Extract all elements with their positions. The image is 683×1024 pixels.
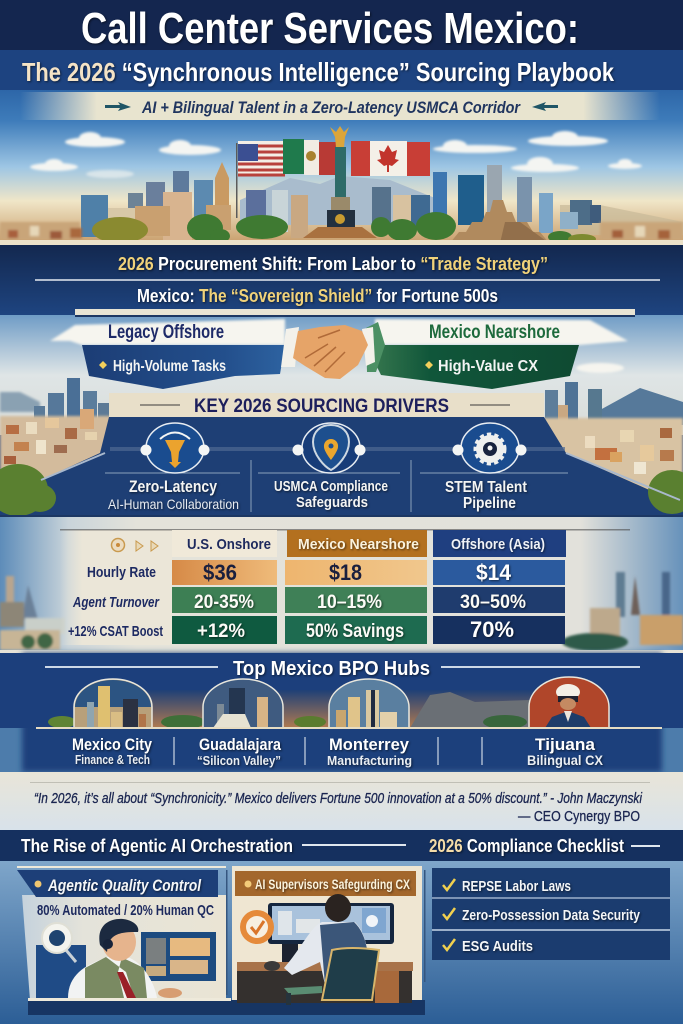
automation split text: 80% Automated / 20% Human QC bbox=[37, 902, 214, 919]
column header: U.S. Onshore bbox=[172, 530, 277, 557]
mexico nearshore ribbon bbox=[366, 345, 579, 389]
hubs heading: Top Mexico BPO Hubs bbox=[233, 658, 430, 680]
left tree bbox=[0, 464, 56, 516]
foreground town bbox=[0, 222, 683, 240]
flag: Mexico bbox=[283, 139, 336, 175]
hub label: Guadalajara: “Silicon Valley” bbox=[197, 753, 281, 768]
row: agent turnover: 30–50% bbox=[460, 592, 526, 613]
row: CSAT boost: 50% Savings bbox=[306, 621, 404, 642]
hub label: Mexico City: Mexico City bbox=[72, 735, 152, 754]
driver label: USMCA bbox=[274, 478, 388, 511]
hub icon: Mexico City bbox=[74, 679, 152, 728]
row: hourly rate: $14 bbox=[476, 560, 512, 585]
hub label: Tijuana bbox=[527, 735, 604, 768]
agent bbox=[68, 919, 182, 998]
stepped pyramid bbox=[450, 200, 549, 243]
hub label: Guadalajara: Guadalajara bbox=[199, 735, 281, 754]
BPO hubs section bbox=[0, 650, 683, 773]
row: agent turnover: 20-35% bbox=[194, 592, 254, 613]
row: hourly rate: $36 bbox=[203, 560, 237, 585]
tagline banner: AI + Bilingual Talent in a Zero-Latency USMCA Corridor bbox=[141, 98, 521, 117]
clouds behind labels bbox=[50, 319, 628, 373]
driver label: USMCA: USMCA Compliance bbox=[274, 478, 388, 495]
illustration: supervisor at workstation bbox=[237, 894, 413, 1005]
hub label: Monterrey: Monterrey bbox=[329, 735, 410, 754]
hero skyline illustration bbox=[0, 90, 683, 245]
main title: Call Center Services Mexico: bbox=[81, 4, 579, 53]
illustration: agent at desk bbox=[36, 919, 216, 998]
hub icon: Monterrey bbox=[329, 679, 409, 728]
driver label: zero latency bbox=[108, 477, 239, 512]
CEO quote bbox=[0, 772, 683, 830]
monitor bbox=[141, 932, 216, 981]
title band bbox=[0, 0, 683, 53]
hub label: Mexico City bbox=[72, 735, 152, 767]
supervisor figure bbox=[264, 894, 369, 985]
clouds bbox=[30, 131, 642, 178]
key sourcing drivers banner: KEY 2026 SOURCING DRIVERS bbox=[194, 396, 449, 417]
Angel of Independence monument bbox=[303, 126, 377, 238]
hub label: Mexico City: Finance & Tech bbox=[75, 752, 150, 767]
check item: REPSE bbox=[443, 878, 571, 895]
column header: Mexico Nearshore bbox=[287, 530, 427, 557]
trees bbox=[92, 212, 596, 244]
driver label: STEM bbox=[445, 479, 528, 512]
flag: United States bbox=[236, 141, 285, 218]
skyline buildings bbox=[81, 162, 601, 242]
icon: compliance shield bbox=[292, 423, 366, 473]
supervisor monitor bbox=[268, 903, 394, 962]
hub label: Monterrey: Manufacturing bbox=[327, 753, 412, 768]
row: agent turnover: Agent Turnover bbox=[72, 594, 160, 611]
plaza bbox=[0, 240, 683, 245]
sovereign shield heading: Mexico: The “Sovereign Shield” for Fortune 500s bbox=[137, 286, 498, 306]
row: hourly rate: $18 bbox=[329, 560, 362, 585]
legacy offshore label: Legacy Offshore bbox=[108, 322, 224, 343]
driver label: zero latency: Zero-Latency bbox=[129, 477, 217, 496]
row: CSAT boost bbox=[68, 616, 565, 644]
CEO quote: — CEO Cynergy BPO bbox=[518, 808, 640, 825]
magnifier icon bbox=[42, 923, 76, 962]
hub label: Guadalajara bbox=[197, 735, 281, 768]
agentic quality control tag: Agentic Quality Control bbox=[47, 876, 202, 895]
column header: Offshore Asia: Offshore (Asia) bbox=[451, 536, 545, 553]
office chair bbox=[284, 948, 379, 1005]
check item: ESG: ESG Audits bbox=[462, 938, 533, 955]
drivers panel bbox=[0, 417, 683, 516]
procurement section bbox=[0, 245, 683, 315]
column header: U.S. Onshore: U.S. Onshore bbox=[187, 536, 271, 553]
side city left bbox=[0, 576, 65, 650]
mexico nearshore label: Mexico Nearshore bbox=[429, 322, 560, 343]
hub label: Monterrey bbox=[327, 735, 412, 768]
mexico nearshore ribbon: High-Value CX bbox=[438, 358, 538, 375]
row: CSAT boost: +12% bbox=[197, 621, 245, 642]
hub icon: Guadalajara bbox=[203, 679, 283, 728]
compliance heading: 2026 Compliance Checklist bbox=[429, 836, 624, 856]
hub label: Tijuana: Tijuana bbox=[535, 735, 596, 754]
icon: STEM talent gear bbox=[452, 423, 526, 473]
lower section background bbox=[0, 861, 683, 1024]
driver label: zero latency: AI-Human Collaboration bbox=[108, 496, 239, 512]
key sourcing drivers banner bbox=[109, 393, 544, 417]
agentic quality control tag bbox=[17, 870, 218, 897]
row: CSAT boost: 70% bbox=[470, 617, 514, 642]
right tree bbox=[648, 470, 683, 514]
agentic AI panel bbox=[17, 866, 426, 1015]
driver label: STEM: STEM Talent bbox=[445, 479, 528, 496]
legacy offshore ribbon: High-Volume Tasks bbox=[113, 358, 226, 375]
row: hourly rate bbox=[87, 560, 565, 585]
column header: Offshore Asia bbox=[433, 530, 566, 557]
table header icons bbox=[112, 538, 158, 552]
flag: Canada bbox=[351, 141, 430, 176]
tagline banner bbox=[20, 92, 660, 120]
left hazy skyline bbox=[0, 378, 120, 486]
hub icon: Tijuana agent bbox=[529, 677, 609, 728]
dusk landscape bbox=[48, 690, 540, 729]
row: CSAT boost: +12% CSAT Boost bbox=[68, 623, 163, 640]
comparison table section bbox=[0, 515, 683, 651]
check item: REPSE: REPSE Labor Laws bbox=[462, 878, 571, 895]
AI supervisors tag bbox=[235, 871, 416, 896]
distant mountains bbox=[240, 176, 440, 225]
row: agent turnover: 10–15% bbox=[317, 592, 382, 613]
driver label: STEM: Pipeline bbox=[463, 495, 516, 512]
compliance checklist panel bbox=[432, 868, 670, 960]
orange check badge bbox=[240, 910, 274, 944]
driver label: USMCA: Safeguards bbox=[296, 494, 368, 511]
right hazy skyline bbox=[530, 382, 683, 508]
check item: zero possession: Zero-Possession Data Security bbox=[462, 907, 641, 924]
column header: Mexico Nearshore: Mexico Nearshore bbox=[298, 536, 419, 553]
hub label: Tijuana: Bilingual CX bbox=[527, 752, 604, 768]
subtitle band bbox=[0, 50, 683, 90]
procurement heading: 2026 Procurement Shift: From Labor to “Trade Strategy” bbox=[118, 254, 548, 274]
row: hourly rate: Hourly Rate bbox=[87, 564, 156, 581]
row: agent turnover bbox=[72, 587, 565, 613]
handshake icon bbox=[281, 322, 385, 379]
side city right bbox=[562, 572, 683, 651]
AI supervisors tag: AI Supervisors Safegurding CX bbox=[255, 876, 410, 892]
section headings band bbox=[0, 830, 683, 861]
agentic AI heading: The Rise of Agentic AI Orchestration bbox=[21, 836, 293, 856]
icon: zero latency signal bbox=[140, 423, 210, 473]
legacy offshore ribbon bbox=[82, 345, 285, 389]
legacy versus nearshore comparison bbox=[0, 309, 683, 508]
